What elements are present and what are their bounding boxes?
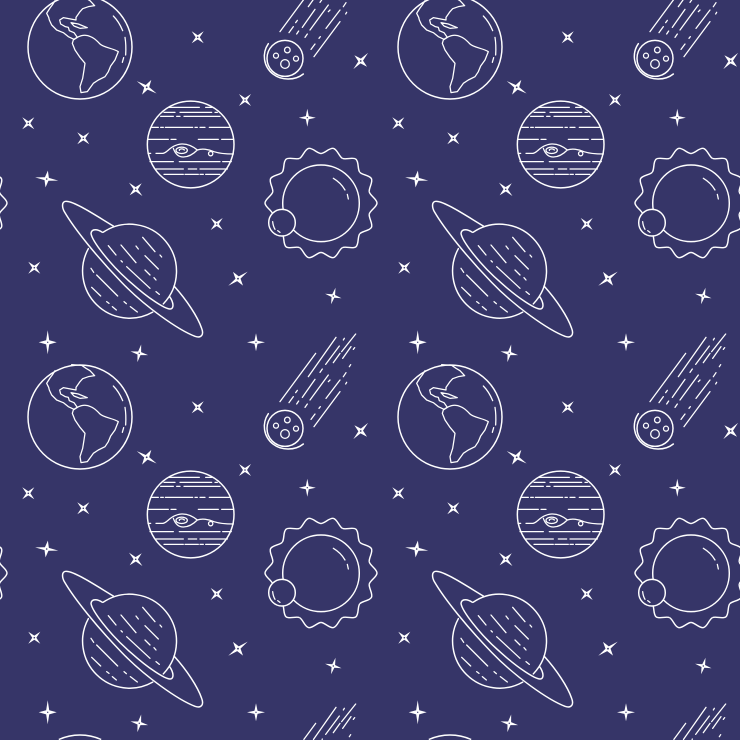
icon: ringed planet bottom-left (63, 571, 203, 707)
icon: ringed planet top-right (433, 201, 573, 337)
icon: earth top-left (27, 0, 133, 100)
icon: comet middle-right (634, 334, 726, 449)
icon: jupiter top-left (147, 101, 234, 188)
icon: jupiter bottom-left (147, 471, 234, 558)
icon: sun with moon, left edge bottom (0, 546, 8, 600)
icon: comet tail, bottom-left (304, 704, 356, 739)
stars: bottom-right tile (386, 395, 740, 734)
icon: comet top-right (634, 0, 718, 80)
icon: comet top-left (264, 0, 348, 80)
stars: top-left tile (16, 25, 374, 364)
icon: sun with moon top-left (265, 146, 377, 260)
icon: sun with moon top-right (634, 148, 740, 258)
icon: sun with moon bottom-right (634, 518, 740, 628)
icon: comet middle-left (264, 334, 356, 449)
icon: earth top-right (397, 0, 503, 100)
icon: comet tail, bottom-right (674, 704, 726, 739)
icon: jupiter bottom-right (517, 471, 604, 558)
icon: earth middle-left (28, 365, 132, 469)
icon: sun with moon bottom-left (265, 516, 377, 630)
stars: bottom-left tile (16, 395, 374, 734)
icon: ringed planet top-left (63, 201, 203, 337)
icon: earth top edge, bottom-left (59, 735, 101, 740)
icon: earth top edge, bottom-right (429, 735, 471, 740)
icon: sun with moon, left edge top (0, 176, 8, 230)
icon: ringed planet bottom-right (433, 571, 573, 707)
stars: top-right tile (386, 25, 740, 364)
icon: jupiter top-right (517, 101, 604, 188)
icon: earth middle-right (398, 365, 502, 469)
